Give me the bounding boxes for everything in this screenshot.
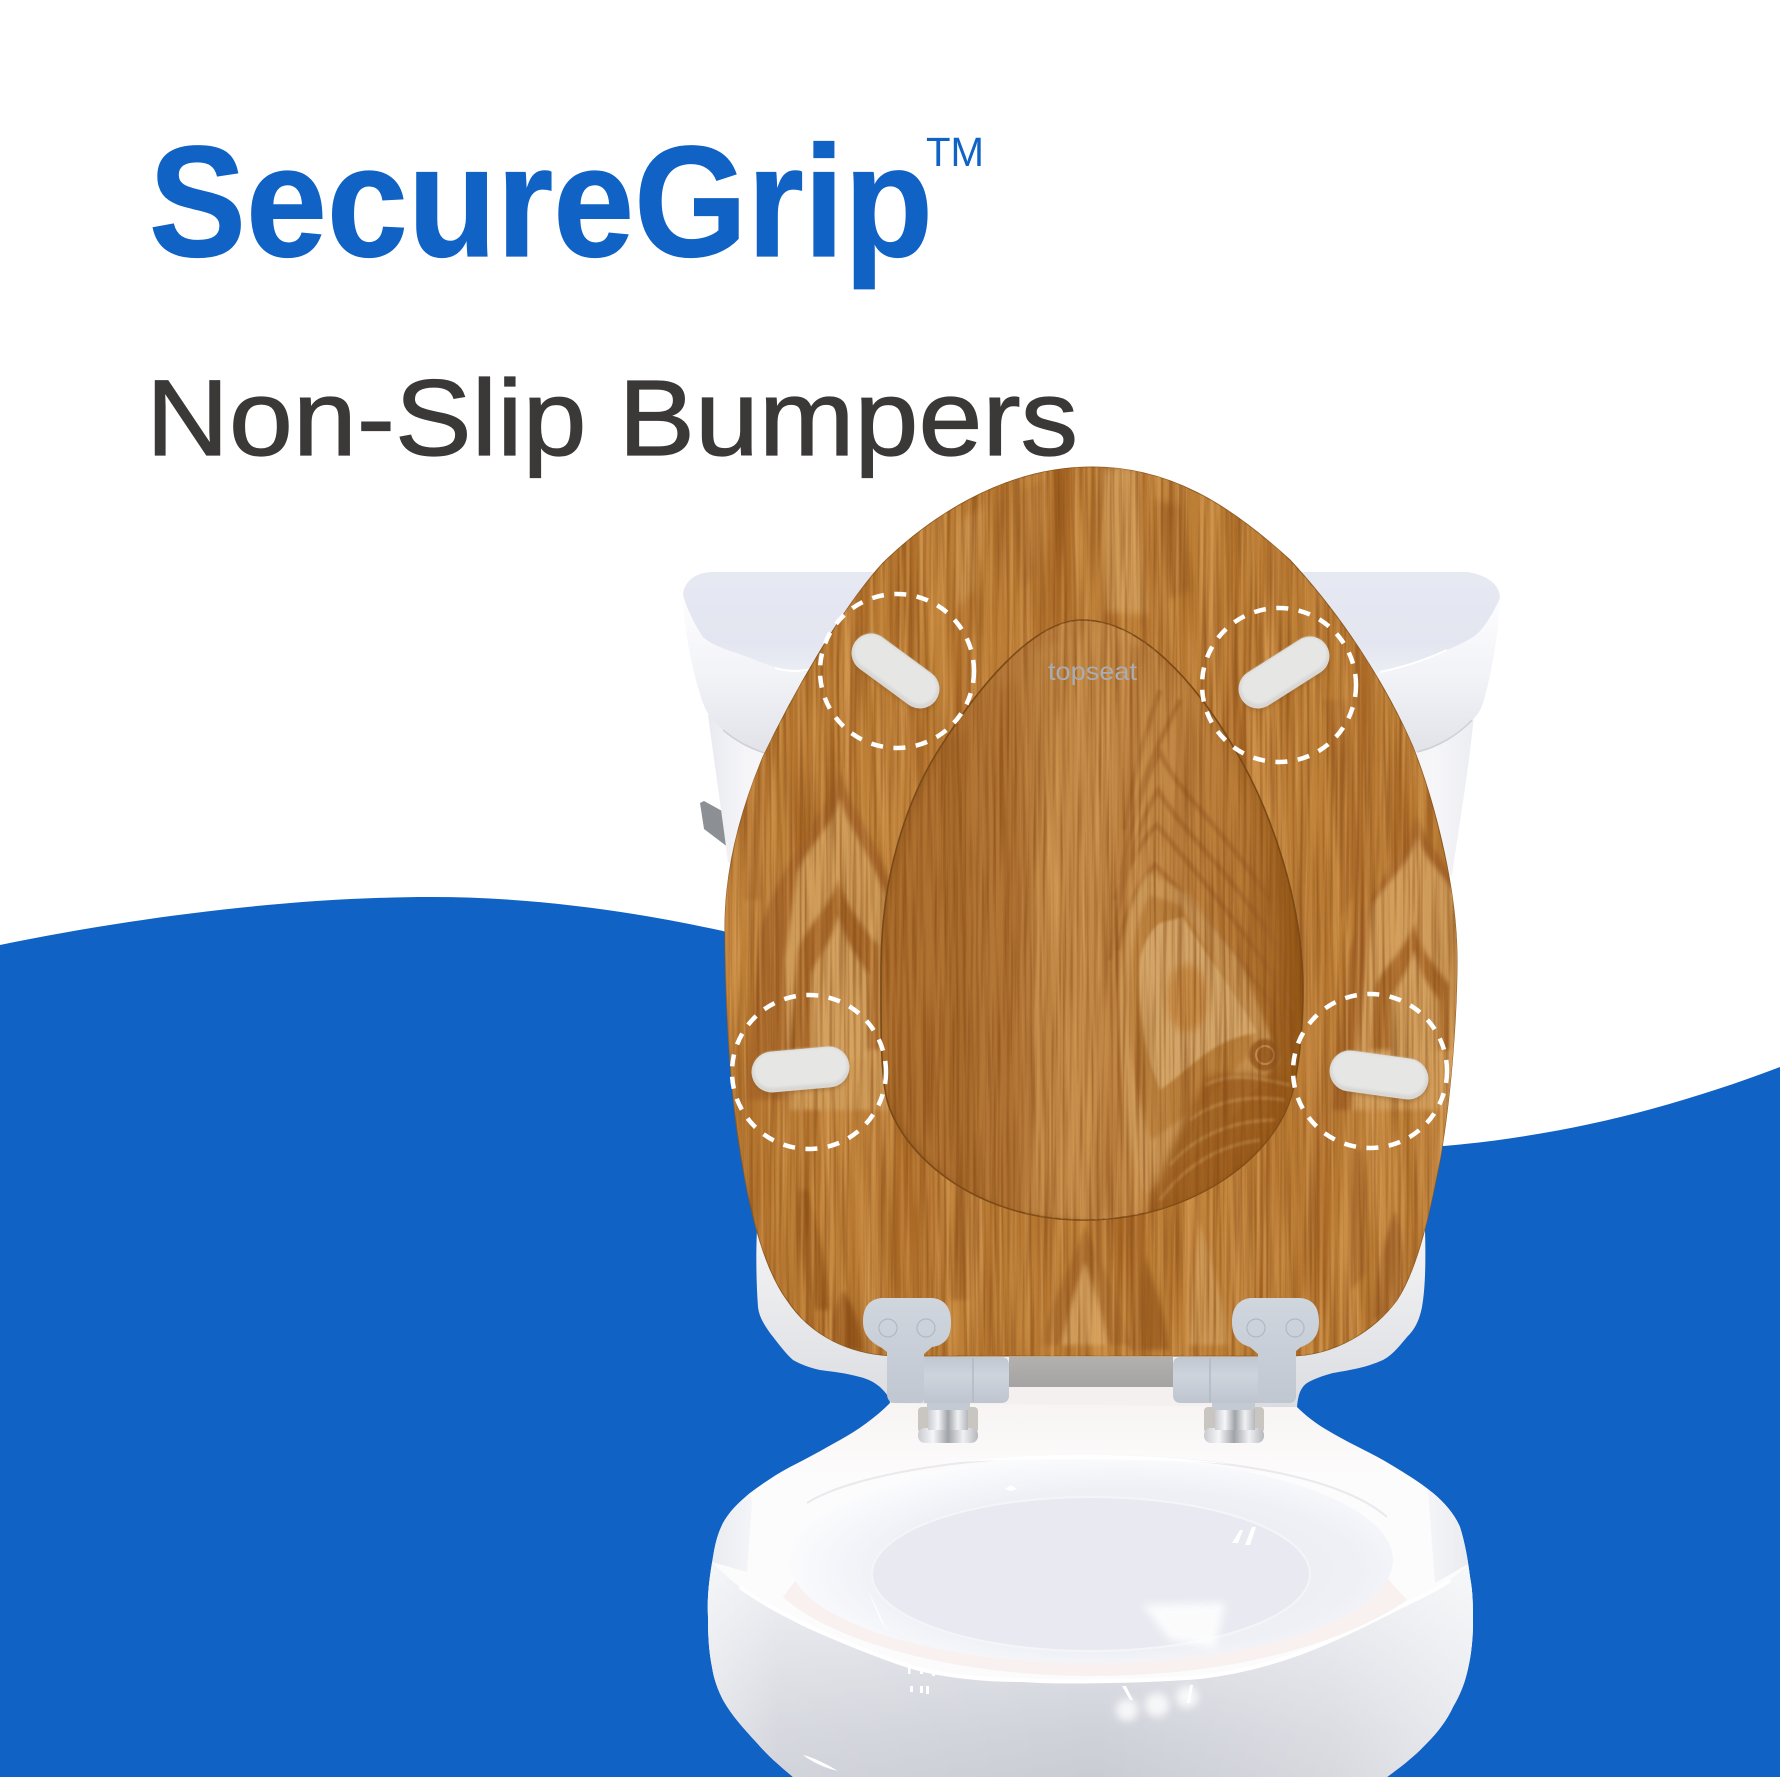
bumper top left xyxy=(871,651,920,691)
callout circle top right xyxy=(1202,608,1356,762)
bowl basin xyxy=(789,1457,1393,1663)
bowl body xyxy=(708,1403,1473,1777)
bowl front xyxy=(700,1555,1490,1780)
rim lip highlight xyxy=(740,1580,1450,1681)
bowl highlights front xyxy=(803,1667,1198,1771)
bottom rail grain xyxy=(799,1150,1403,1350)
callout circle bottom right xyxy=(1293,994,1447,1148)
lid crease highlight xyxy=(775,650,1447,672)
toilet illustration xyxy=(683,450,1500,1780)
recess chevron grain xyxy=(1110,690,1295,1040)
recess grain tones xyxy=(945,630,1150,1220)
tank lid front xyxy=(683,600,1500,752)
panel under hinges xyxy=(960,1350,1230,1420)
left hinge cylinder xyxy=(924,1357,1009,1403)
top grain xyxy=(955,468,1190,615)
rim side facet right xyxy=(1428,1490,1468,1582)
small knot xyxy=(1249,1039,1281,1071)
toilet tank xyxy=(683,572,1500,900)
right hinge nub xyxy=(1212,1400,1255,1410)
recess knot ring band xyxy=(1128,895,1255,1140)
dashed callout circles xyxy=(732,594,1447,1149)
bumpers xyxy=(772,651,1408,1081)
right hinge xyxy=(1173,1298,1319,1410)
rim side facet left xyxy=(712,1492,752,1572)
bowl water xyxy=(872,1497,1310,1651)
seat recess xyxy=(860,600,1340,1240)
lower right dark grain xyxy=(1140,1074,1305,1230)
title text: SecureGrip: SecureGrip xyxy=(149,114,933,290)
toilet neck behind seat xyxy=(756,1230,1425,1407)
recess right wall shadow xyxy=(1140,620,1340,1225)
subtitle: Non-Slip Bumpers xyxy=(146,357,1078,478)
toilet bowl xyxy=(700,1403,1490,1780)
lid lower seam xyxy=(723,720,1472,754)
pink rim reflection xyxy=(783,1570,1407,1676)
recess left shadow xyxy=(870,640,1003,960)
recess knot center xyxy=(1167,964,1207,1032)
bumper top right xyxy=(1258,654,1310,691)
title xyxy=(149,114,984,290)
icon: flush lever xyxy=(700,799,748,851)
cathedral grain left xyxy=(745,730,889,1112)
callout circle bottom left xyxy=(732,995,886,1149)
hinge back bar xyxy=(1009,1357,1173,1387)
recess knot light core xyxy=(1139,917,1257,1090)
blue wave background xyxy=(0,897,1780,1777)
callout circle top left xyxy=(820,594,974,748)
wood grain xyxy=(700,450,1480,1370)
recess knot outer ring xyxy=(1120,872,1280,1195)
tank body xyxy=(708,715,1474,900)
bumper bottom left xyxy=(772,1065,829,1074)
cathedral grain right xyxy=(1322,700,1470,1110)
bowl reflections xyxy=(868,1455,1256,1648)
right bolt xyxy=(1204,1400,1264,1443)
hinges xyxy=(863,1298,1319,1410)
left hinge xyxy=(863,1298,1009,1410)
right hinge cylinder xyxy=(1173,1357,1258,1403)
chrome hinge bolts xyxy=(918,1400,1264,1443)
left hinge arm xyxy=(863,1298,951,1403)
bumper bottom right xyxy=(1350,1069,1408,1081)
left hinge nub xyxy=(927,1400,970,1410)
trademark: TM xyxy=(926,129,984,175)
wood toilet seat lid xyxy=(700,450,1480,1410)
left bolt xyxy=(918,1400,978,1443)
tank lid top xyxy=(683,572,1500,673)
brand mark: topseat xyxy=(1048,658,1137,686)
seat base xyxy=(725,467,1457,1356)
recess bottom shadow xyxy=(880,1090,1085,1240)
right hinge arm xyxy=(1232,1298,1319,1403)
